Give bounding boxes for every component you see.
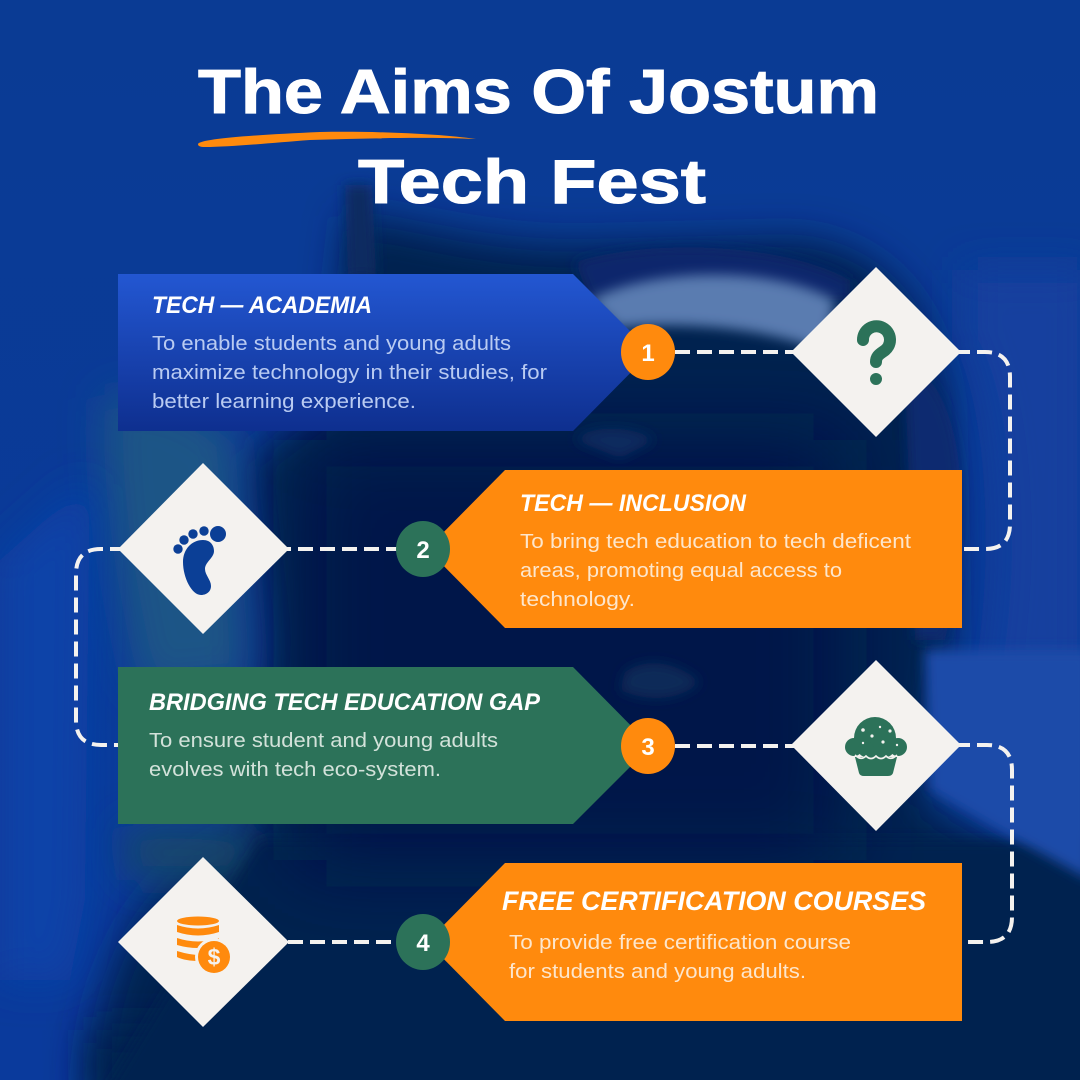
text: tech academia description: To enable students and young adults	[152, 332, 511, 355]
badge: number 2: 2	[416, 537, 430, 564]
text: tech inclusion description: To bring tech education to tech deficent	[520, 530, 911, 553]
text: tech academia description: maximize technology in their studies, for	[152, 361, 547, 384]
text: free certification description	[509, 931, 851, 983]
title	[198, 58, 879, 217]
badge: number 2	[396, 521, 450, 577]
title: The Aims Of Jostum	[198, 58, 879, 127]
badge: number 3: 3	[641, 734, 655, 761]
panel: tech academia	[118, 274, 651, 431]
heading: tech inclusion: TECH — INCLUSION	[520, 490, 747, 517]
dashed connector: step 4	[288, 940, 402, 944]
panel: free certification courses	[427, 863, 962, 1021]
badge: number 4: 4	[416, 930, 430, 957]
badge: number 1: 1	[641, 340, 655, 367]
panel: tech inclusion	[427, 470, 962, 628]
dashed connector: 3 to 4	[675, 745, 1012, 942]
text: bridging gap description	[149, 729, 498, 781]
text: tech inclusion description: technology.	[520, 588, 635, 611]
text: tech academia description: better learning experience.	[152, 390, 416, 413]
diamond: coins icon: $	[208, 944, 221, 970]
text: tech inclusion description: areas, promoting equal access to	[520, 559, 842, 582]
diamond: coins icon	[118, 857, 289, 1027]
text: bridging gap description: evolves with tech eco-system.	[149, 758, 441, 781]
panel: bridging tech education gap	[118, 667, 651, 824]
badge: number 4	[396, 914, 450, 970]
text: tech inclusion description	[520, 530, 911, 611]
orange brush underline	[198, 132, 476, 147]
badge: number 3	[621, 718, 675, 774]
dashed connector: 1 to 2	[675, 352, 1010, 549]
heading: free certification courses: FREE CERTIFICATION COURSES	[502, 886, 926, 916]
text: free certification description: To provide free certification course	[509, 931, 851, 954]
badge: number 1	[621, 324, 675, 380]
diamond: question mark icon	[791, 267, 961, 437]
text: bridging gap description: To ensure student and young adults	[149, 729, 498, 752]
text: free certification description: for students and young adults.	[509, 960, 806, 983]
heading: bridging tech education gap: BRIDGING TECH EDUCATION GAP	[149, 689, 541, 716]
heading: tech academia: TECH — ACADEMIA	[152, 292, 372, 319]
diamond: cupcake icon	[791, 660, 961, 831]
text: tech academia description	[152, 332, 547, 413]
diamond: footprint icon	[118, 463, 289, 634]
dashed connector: 2 to 3	[76, 549, 423, 745]
title: Tech Fest	[358, 148, 706, 217]
